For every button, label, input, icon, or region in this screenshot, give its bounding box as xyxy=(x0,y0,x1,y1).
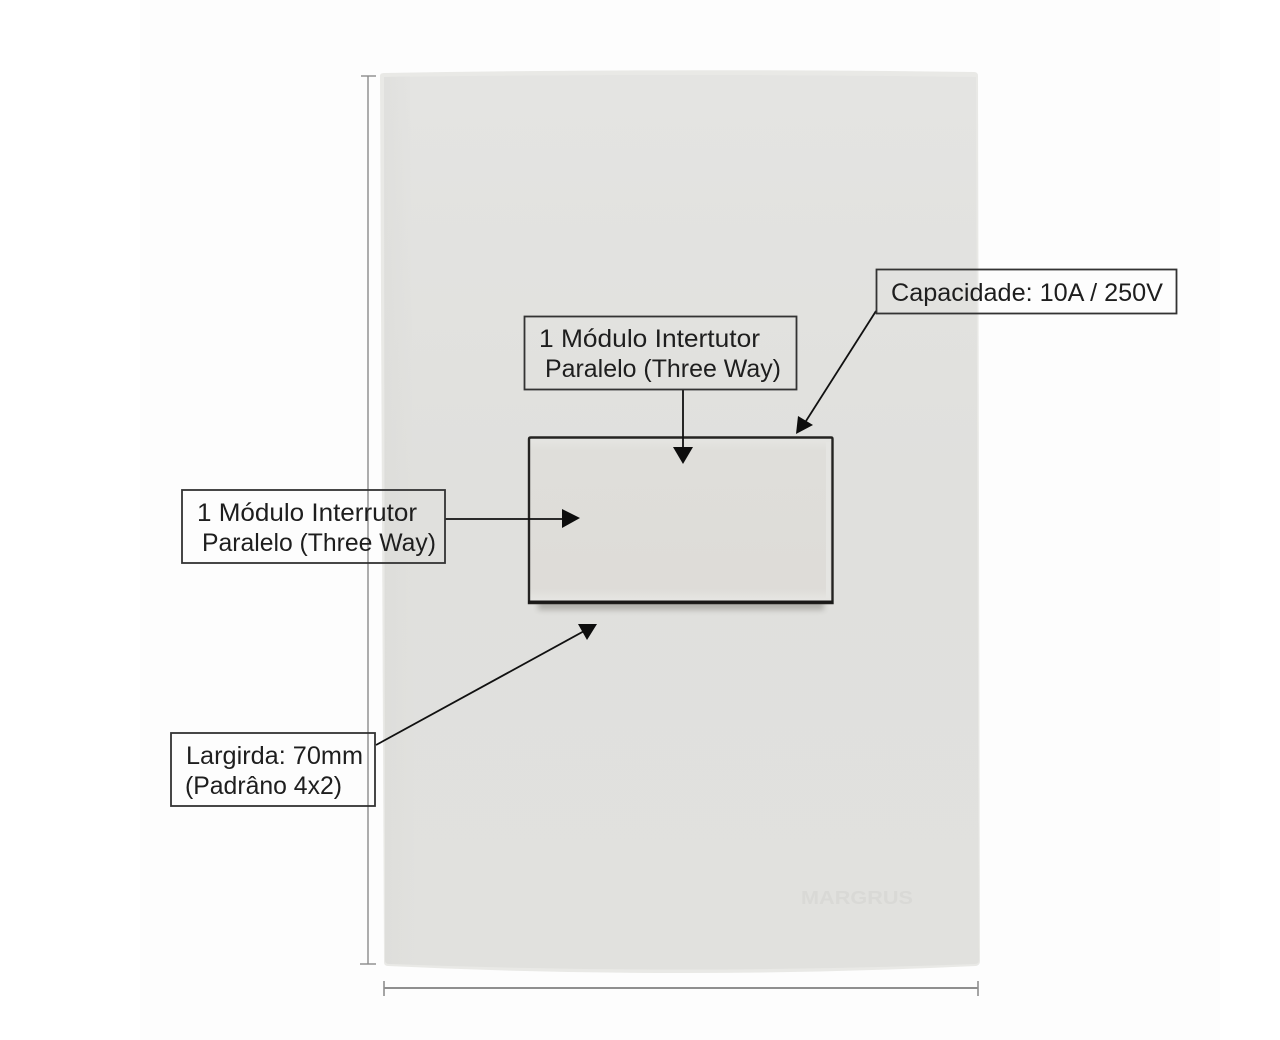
callout: top module: 1 Módulo Intertutor xyxy=(539,325,760,353)
switch module xyxy=(528,438,833,610)
callout: width: (Padrâno 4x2) xyxy=(185,772,342,800)
height dimension line xyxy=(360,76,376,964)
callout: capacity xyxy=(876,270,1176,314)
callout: width xyxy=(171,733,375,806)
callout: top module xyxy=(524,316,796,390)
embossed brand mark: MARGRUS xyxy=(801,888,913,908)
arrow: capacity xyxy=(796,311,876,434)
wall plate xyxy=(380,70,980,973)
callout: left module xyxy=(182,490,445,563)
callout: width: Largirda: 70mm xyxy=(186,742,363,770)
arrow: top module xyxy=(673,390,693,464)
arrow: width xyxy=(376,624,597,745)
callout: left module: Paralelo (Three Way) xyxy=(202,529,436,557)
callout: left module: 1 Módulo Interrutor xyxy=(197,499,417,527)
width dimension line xyxy=(384,981,978,996)
callout: capacity: Capacidade: 10A / 250V xyxy=(891,279,1163,307)
callout: top module: Paralelo (Three Way) xyxy=(545,355,781,383)
arrow: left module xyxy=(445,509,580,528)
